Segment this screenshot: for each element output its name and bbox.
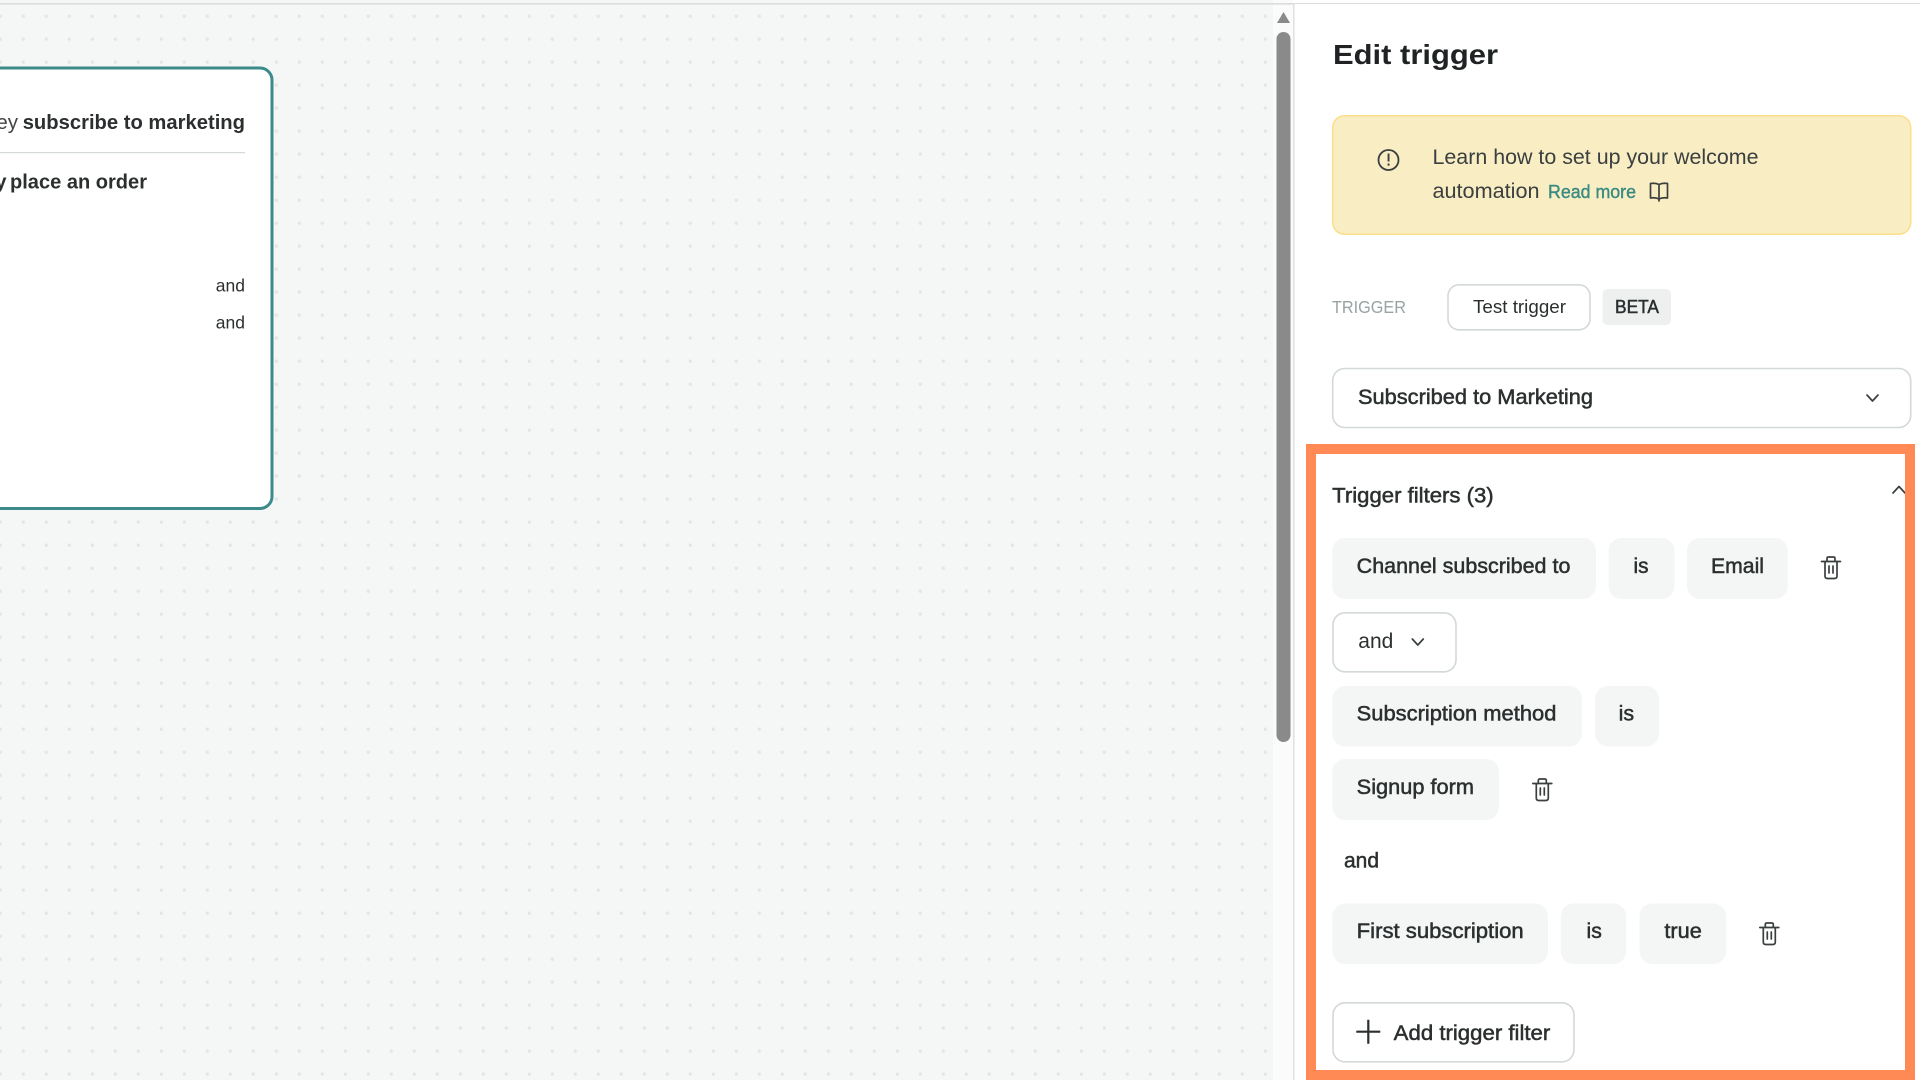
icon: trash (1533, 779, 1552, 800)
link: Read more: Read more (1548, 181, 1636, 202)
badge: BETA (1602, 289, 1671, 325)
icon: trash (1822, 557, 1840, 578)
panel: edit trigger sidebar (1293, 4, 1920, 1080)
filter row: channel subscribed to (1332, 538, 1840, 599)
callout: welcome automation (1333, 116, 1911, 234)
text: automation: automation (1432, 180, 1540, 203)
filter row: subscription method (1332, 686, 1659, 746)
filter row: first subscription: is (1586, 920, 1602, 943)
button: add trigger filter: Add trigger filter (1394, 1022, 1550, 1045)
filter row: signup form: Signup form (1357, 776, 1474, 799)
icon: info (1378, 150, 1398, 170)
text: subscribe to marketing: subscribe to marketing (23, 111, 245, 134)
text: callout message: Learn how to set up your welcome (1432, 146, 1758, 169)
button: Test trigger: Test trigger (1473, 296, 1566, 317)
button: Test trigger (1448, 285, 1590, 330)
filter row: channel subscribed to: is (1634, 555, 1648, 578)
icon: trash (1760, 923, 1779, 944)
label: TRIGGER: TRIGGER (1332, 297, 1406, 317)
button: add trigger filter (1333, 1003, 1574, 1062)
dropdown: and (1333, 613, 1456, 672)
text: and connector 1: and (216, 276, 245, 296)
heading: Trigger filters: Trigger filters (3) (1332, 484, 1494, 508)
filter row: channel subscribed to: Email (1711, 555, 1764, 578)
dropdown: and: and (1358, 630, 1393, 653)
icon: book (1650, 183, 1668, 201)
dropdown: Subscribed to Marketing (1333, 368, 1911, 428)
highlight: orange frame around trigger filters (1311, 449, 1910, 1075)
scrollbar (1276, 12, 1290, 742)
panel: trigger card (0, 68, 272, 508)
filter row: first subscription: true (1664, 920, 1702, 943)
heading: Edit trigger: Edit trigger (1333, 39, 1498, 70)
filter row: first subscription: First subscription (1357, 920, 1524, 943)
text: and connector 2: and (216, 312, 245, 332)
text: and: and (1344, 850, 1379, 872)
badge: BETA: BETA (1615, 296, 1660, 317)
filter row: subscription method: Subscription method (1357, 702, 1556, 726)
filter row: channel subscribed to: Channel subscribed to (1357, 555, 1570, 578)
filter row: subscription method: is (1619, 702, 1634, 726)
icon: collapse chevron (1893, 486, 1905, 493)
dropdown: Subscribed to Marketing: Subscribed to Marketing (1358, 386, 1593, 409)
filter row: signup form (1332, 759, 1552, 820)
text: place an order: place an order (10, 170, 147, 194)
panel: trigger filters (1332, 484, 1905, 1062)
filter row: first subscription (1332, 904, 1779, 964)
